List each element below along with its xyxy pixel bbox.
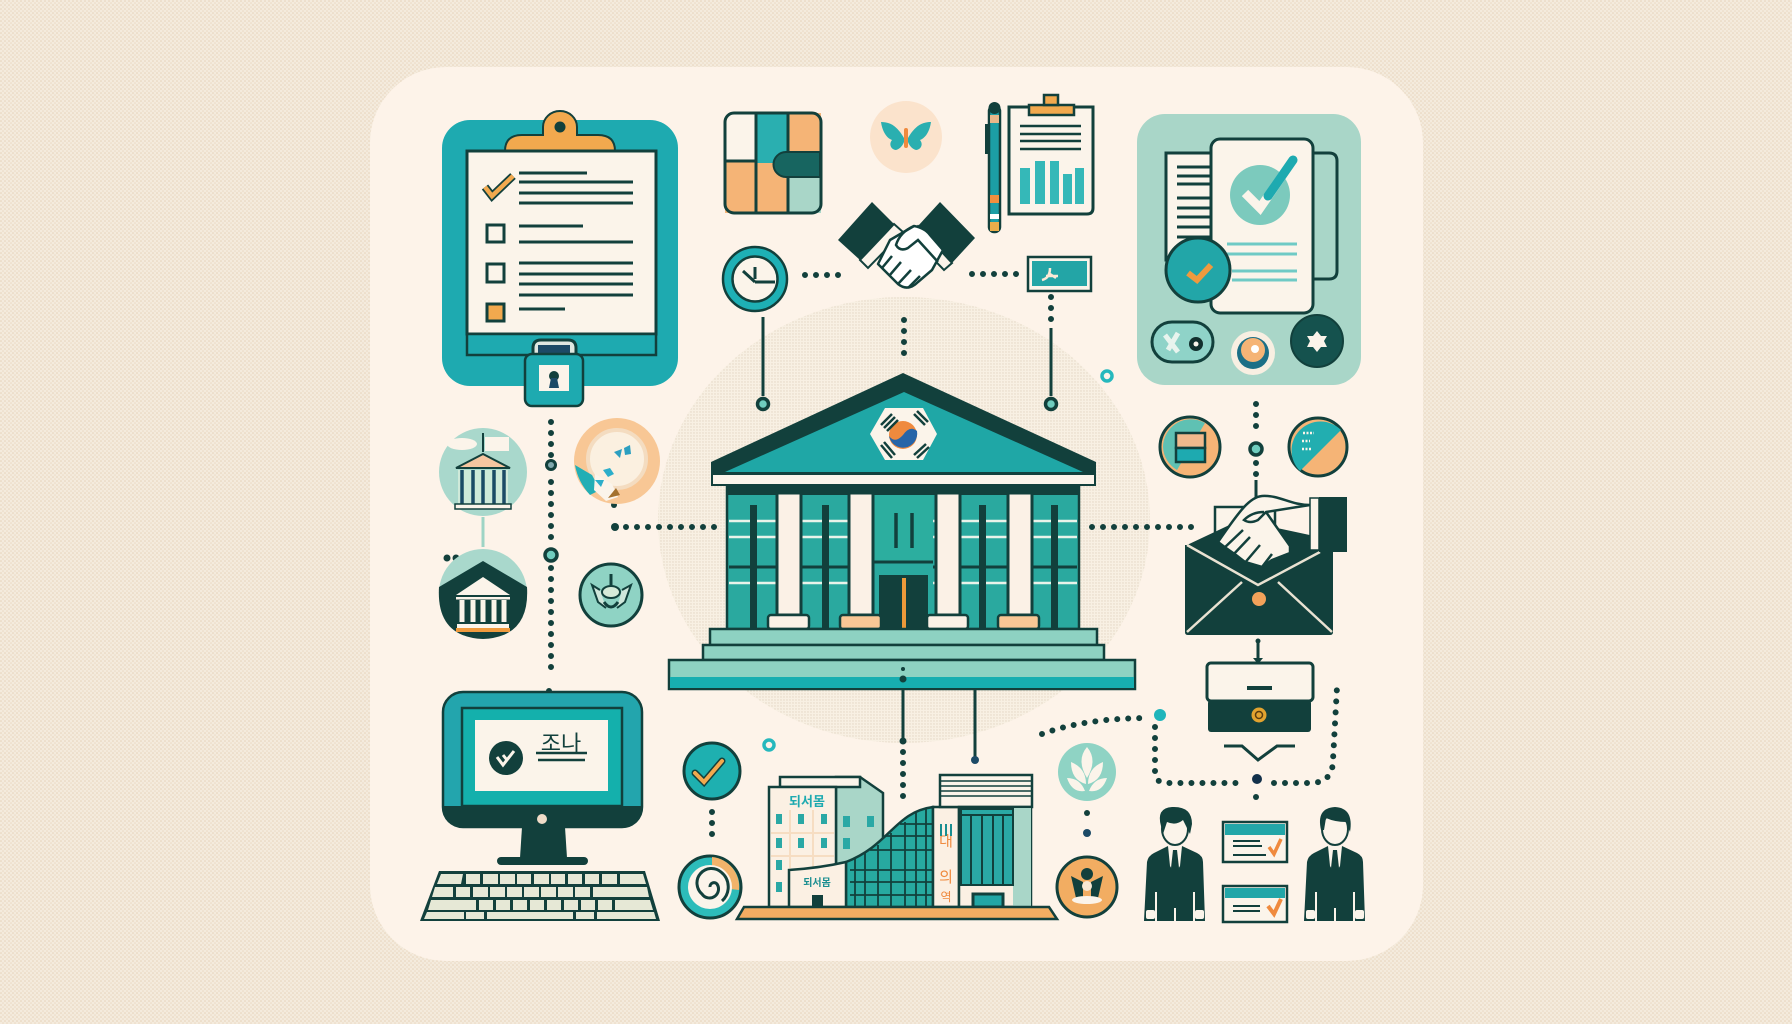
facade [727, 486, 1079, 629]
clipboard clip [505, 111, 615, 151]
icon: handshake top [838, 202, 975, 288]
round seal [1231, 331, 1275, 375]
icon: small cyan rings [764, 371, 1112, 750]
icon: colour tile grid [725, 113, 821, 213]
icon: data badge [1289, 418, 1347, 476]
icon: bank badge sky [439, 428, 527, 516]
facade window lines [729, 495, 1077, 629]
paper sheet [467, 151, 656, 334]
pill badge [1152, 322, 1213, 362]
monitor [443, 692, 642, 865]
connector lines [444, 274, 1337, 843]
icon: ballot box [1207, 638, 1313, 760]
icon: pen [985, 102, 1000, 232]
cornice [712, 474, 1095, 485]
back page right [1300, 153, 1337, 279]
tower sign: 되서몸 [789, 794, 825, 809]
icon: bank badge dark [439, 549, 527, 639]
checklist boxes [487, 225, 504, 321]
icon: small teal label [1028, 257, 1091, 291]
orange platform [737, 907, 1057, 919]
icon: butterfly badge [870, 101, 942, 173]
orange check mark [485, 176, 513, 196]
sign tower [933, 807, 959, 907]
keyboard [420, 871, 660, 921]
icon: envelope with handshake [1185, 496, 1347, 635]
columns [777, 493, 1032, 615]
panel: main card [370, 67, 1423, 961]
buildings group: 역 [940, 890, 952, 904]
page text lines [1227, 244, 1297, 280]
dark star badge [1291, 315, 1343, 367]
curved glass hall [846, 807, 933, 907]
column bases [768, 615, 1039, 629]
checklist text lines [519, 173, 633, 309]
dotted background circle [658, 297, 1150, 743]
left tower [836, 777, 883, 880]
icon: emblem badge [580, 564, 642, 626]
teal badge with check [1166, 238, 1230, 302]
buildings group: 의 [939, 869, 953, 886]
icon: orange map badge [574, 418, 660, 504]
panel: checklist clipboard [442, 111, 678, 406]
striped roof box [940, 775, 1032, 807]
right building [959, 807, 1031, 907]
padlock [525, 340, 583, 406]
back page left [1166, 153, 1216, 260]
icon: check badge [684, 743, 740, 799]
icon: spiral badge [679, 856, 741, 918]
entrance door [873, 565, 933, 629]
large check circle [1230, 165, 1290, 225]
hands [1218, 496, 1310, 567]
low front building [789, 862, 846, 907]
main page [1211, 139, 1313, 313]
icon: layout badge [1160, 417, 1220, 477]
screen message [475, 720, 608, 791]
card: approval top [1223, 822, 1287, 862]
buildings group: 되서몸 [803, 876, 831, 889]
panel: approved documents [1137, 114, 1361, 385]
card: approval bottom [1223, 886, 1287, 922]
icon: emblem orange badge [1057, 857, 1117, 917]
mini bar chart [1020, 161, 1084, 204]
footer band [467, 334, 656, 355]
roof [711, 373, 1096, 474]
buildings group: 대 [939, 833, 953, 850]
icon: clock [723, 247, 787, 311]
person right [1304, 807, 1365, 921]
flag emblem [870, 408, 937, 460]
screen label: 조나 [541, 731, 581, 756]
central building [669, 373, 1135, 689]
icon: report clipboard with bars [1009, 95, 1093, 214]
buildings group [737, 775, 1057, 919]
person left [1144, 807, 1205, 921]
stairs [669, 629, 1135, 689]
icon: leaf badge [1058, 743, 1116, 801]
